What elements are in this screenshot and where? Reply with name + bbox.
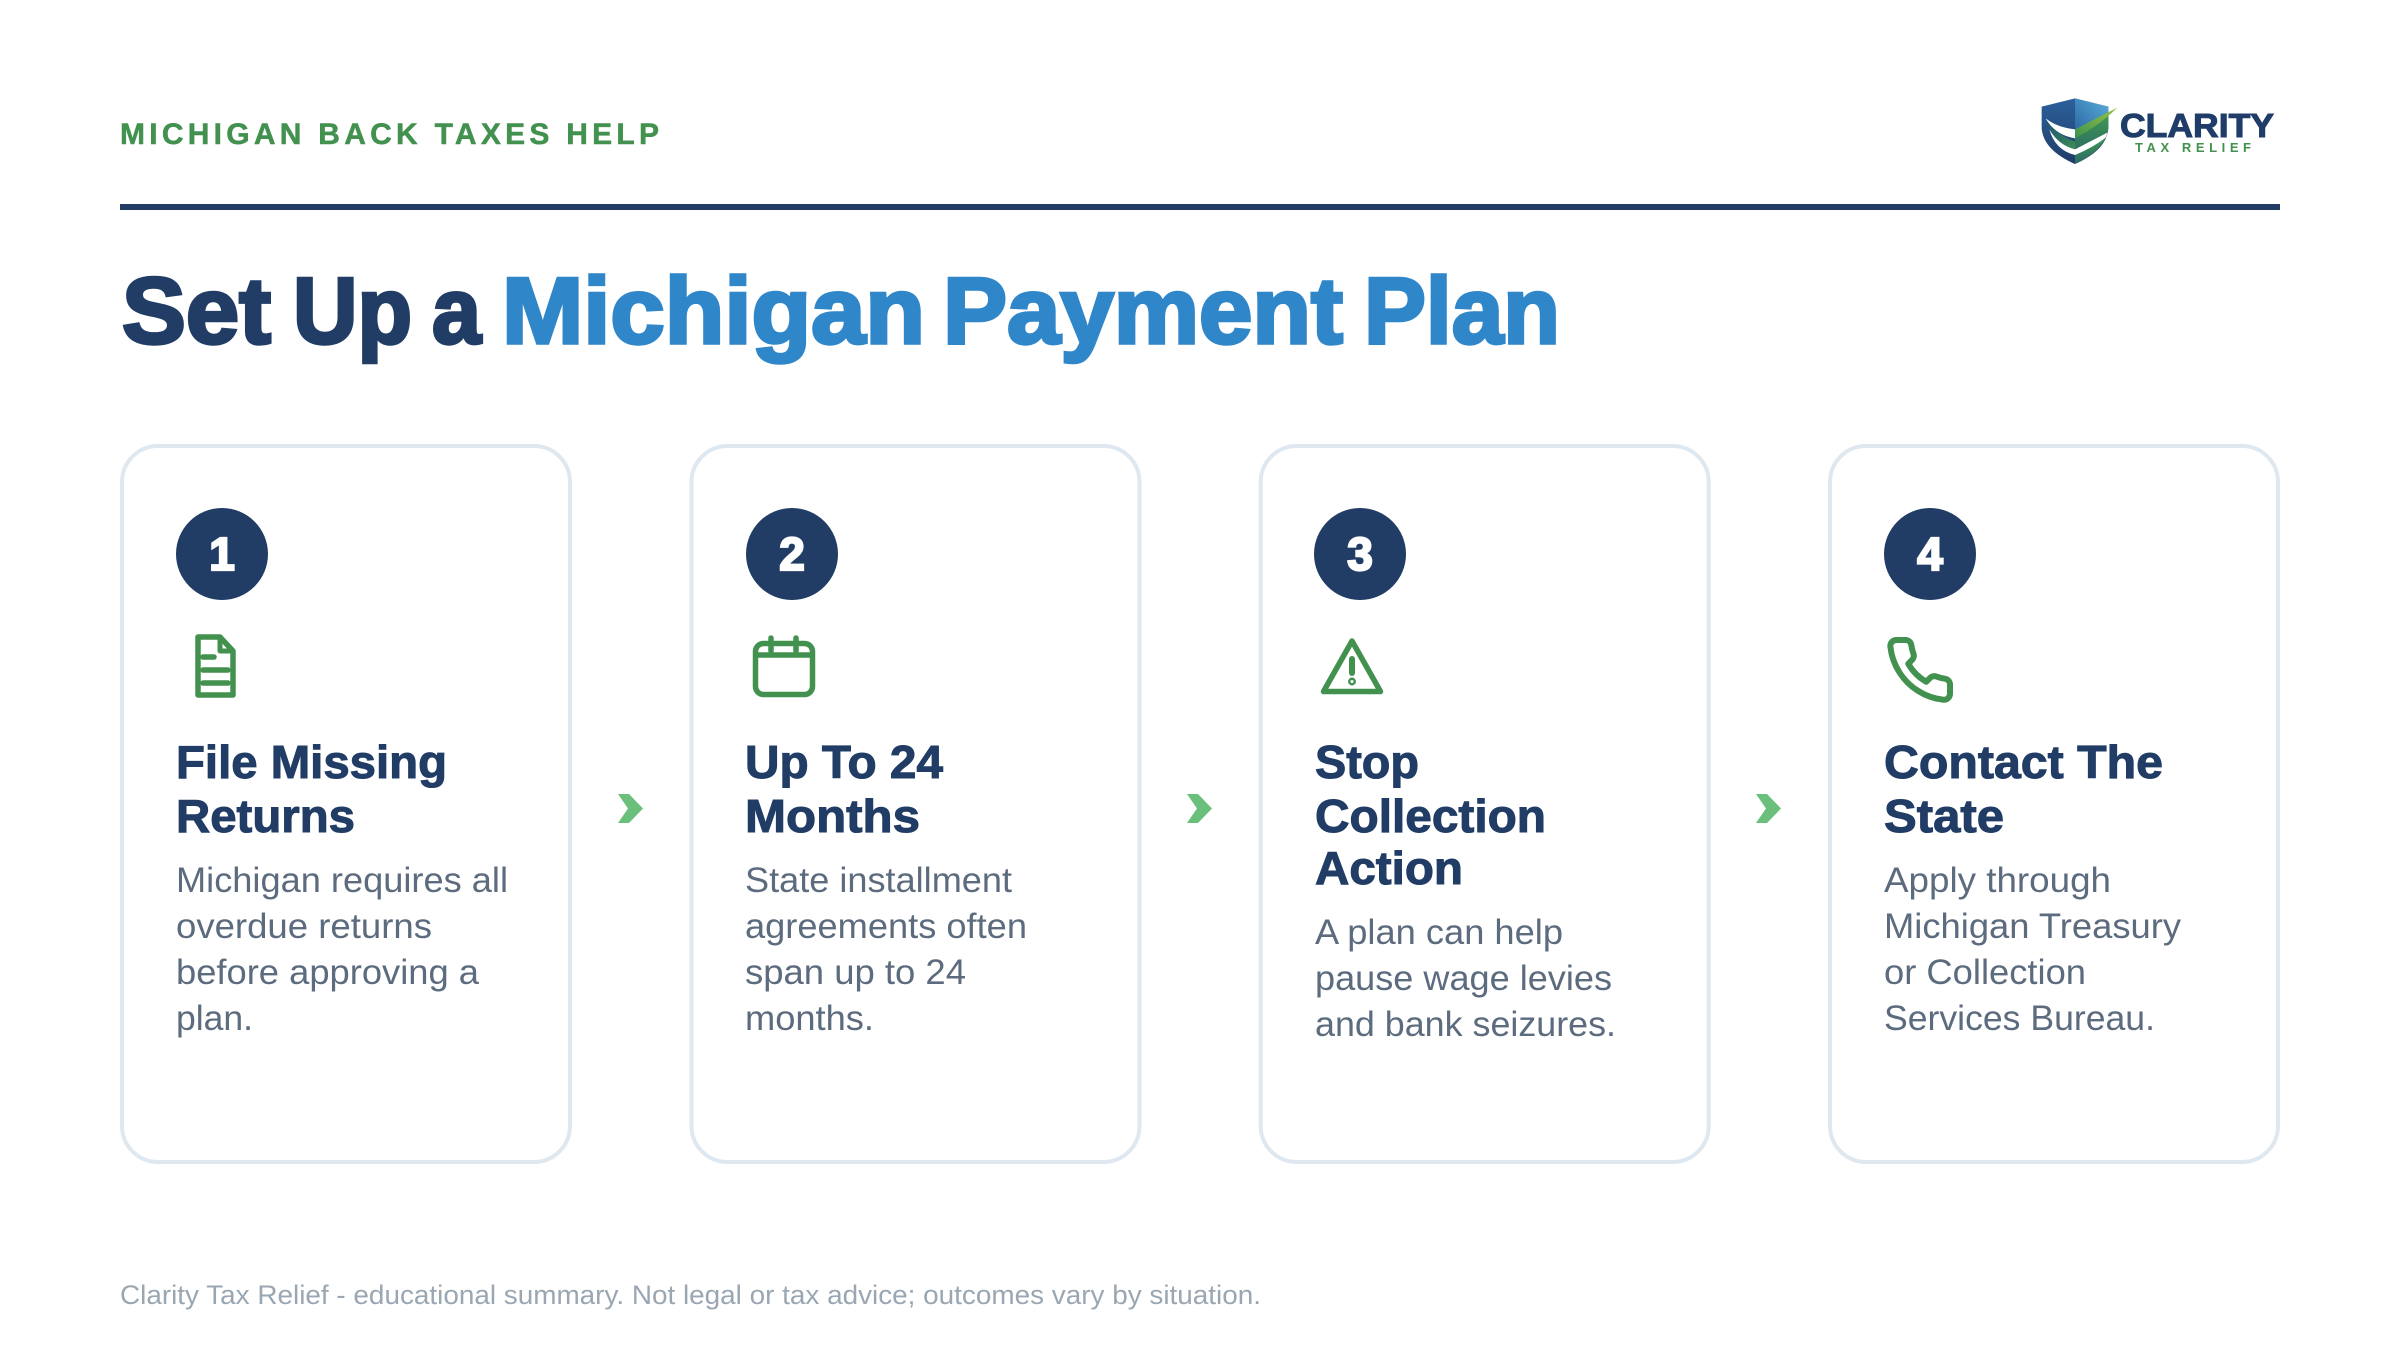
panel: step 3 bbox=[1261, 446, 1709, 1162]
step 3 heading: Stop bbox=[1315, 736, 1419, 788]
step 4 body text: Apply through bbox=[1884, 861, 2111, 900]
arrow 3 to 4 bbox=[1756, 794, 1781, 823]
eyebrow heading: MICHIGAN BACK TAXES HELP bbox=[120, 118, 659, 151]
step 3 body text: pause wage levies bbox=[1315, 959, 1612, 998]
icon: warning triangle bbox=[1324, 641, 1380, 692]
step number 3: 3 bbox=[1347, 528, 1373, 580]
panel: step 1 bbox=[122, 446, 570, 1162]
step 2 body text: span up to 24 bbox=[745, 953, 966, 992]
step 3 body text: A plan can help bbox=[1315, 913, 1563, 952]
panel: step 2 bbox=[692, 446, 1140, 1162]
step 3 heading: Collection bbox=[1315, 790, 1546, 842]
step 3 body text: and bank seizures. bbox=[1315, 1005, 1616, 1044]
icon: phone bbox=[1890, 640, 1950, 700]
step number 4: 4 bbox=[1917, 528, 1943, 580]
step 4 body text: or Collection bbox=[1884, 953, 2086, 992]
step number 1 bbox=[176, 508, 268, 600]
step 4 body text: Michigan Treasury bbox=[1884, 907, 2182, 946]
title: Michigan bbox=[502, 258, 925, 363]
step number 2: 2 bbox=[779, 528, 805, 580]
step 3 heading: Action bbox=[1315, 842, 1463, 894]
logo: Clarity Tax Relief: CLARITY bbox=[2120, 107, 2274, 144]
step 1 body text bbox=[176, 861, 508, 1038]
icon: shield with check bbox=[2042, 98, 2117, 164]
step 4 heading: Contact The bbox=[1884, 736, 2163, 788]
logo: Clarity Tax Relief bbox=[2042, 98, 2274, 164]
logo: Clarity Tax Relief: TAX RELIEF bbox=[2135, 140, 2251, 155]
step number 2 bbox=[746, 508, 838, 600]
step 1 heading: File Missing bbox=[176, 736, 447, 788]
title: Set bbox=[122, 258, 271, 363]
icon: document bbox=[198, 637, 233, 695]
header rule bbox=[120, 204, 2280, 210]
step number 3 bbox=[1314, 508, 1406, 600]
step 2 body text: agreements often bbox=[745, 907, 1027, 946]
step 4 heading bbox=[1884, 736, 2163, 842]
step 1 body text: Michigan requires all bbox=[176, 861, 508, 900]
icon: calendar bbox=[756, 638, 812, 694]
arrow 1 to 2 bbox=[618, 794, 643, 823]
step 4 body text: Services Bureau. bbox=[1884, 999, 2155, 1038]
arrow 2 to 3 bbox=[1187, 794, 1212, 823]
title: Plan bbox=[1364, 258, 1560, 363]
step 1 body text: plan. bbox=[176, 999, 253, 1038]
step 1 body text: overdue returns bbox=[176, 907, 432, 946]
footer disclaimer: Clarity Tax Relief - educational summary. Not legal or tax advice; outcomes vary by situation. bbox=[120, 1280, 1261, 1310]
step number 1: 1 bbox=[209, 528, 235, 580]
step 2 body text: State installment bbox=[745, 861, 1012, 900]
step 4 body text bbox=[1884, 861, 2182, 1038]
step 1 body text: before approving a bbox=[176, 953, 480, 992]
panel: step 4 bbox=[1830, 446, 2278, 1162]
step 2 heading bbox=[745, 736, 943, 842]
step 1 heading: Returns bbox=[176, 790, 355, 842]
title: Payment bbox=[943, 258, 1343, 363]
step 2 heading: Months bbox=[745, 790, 920, 842]
step 2 body text bbox=[745, 861, 1027, 1038]
step 3 body text bbox=[1315, 913, 1616, 1044]
step 4 heading: State bbox=[1884, 790, 2004, 842]
step 2 body text: months. bbox=[745, 999, 874, 1038]
step 1 heading bbox=[176, 736, 447, 842]
title bbox=[122, 258, 1560, 363]
step number 4 bbox=[1884, 508, 1976, 600]
step 3 heading bbox=[1315, 736, 1546, 894]
step 2 heading: Up To 24 bbox=[745, 736, 943, 788]
title: Up bbox=[293, 258, 412, 363]
title: a bbox=[432, 258, 482, 363]
